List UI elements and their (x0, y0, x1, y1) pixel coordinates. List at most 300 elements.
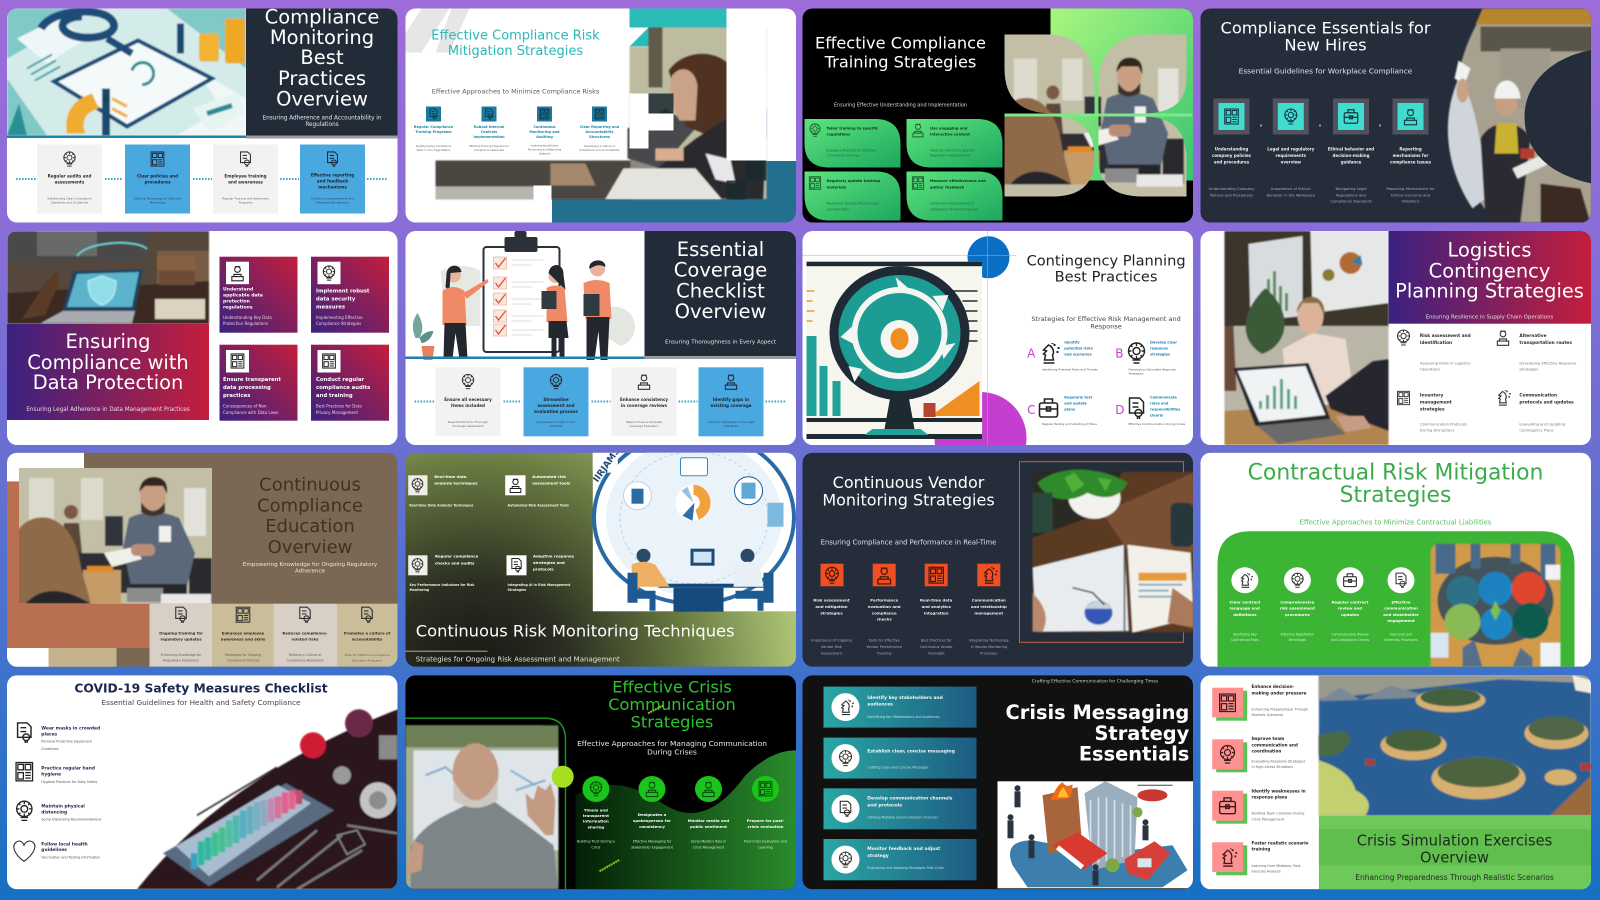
item B: B (1115, 346, 1124, 360)
card: audits and training (311, 345, 389, 421)
item: legal requirements: overview (1281, 160, 1301, 164)
card: data protection regulations: Protection Regulations (223, 321, 268, 326)
card: update materials: materials (826, 186, 847, 190)
title: Overview (276, 88, 368, 110)
subtitle: Adherence (295, 568, 326, 574)
subtitle: Empowering Knowledge for Ongoing Regulatory (243, 562, 378, 568)
item: risk assessment (1398, 330, 1471, 372)
subtitle: Essential Guidelines for Health and Safety Compliance (101, 698, 301, 707)
card: data protection regulations: protection (223, 298, 250, 304)
card: policies (125, 144, 190, 214)
item: monitor media: public sentiment (690, 824, 727, 829)
card: measure effectiveness (906, 172, 1002, 220)
top caption: Crafting Effective Communication for Challenging Times (1032, 678, 1159, 684)
item: monitoring (528, 106, 561, 156)
item: weaknesses: Identify weaknesses in (1252, 788, 1306, 793)
item: realistic scenarios (1212, 840, 1309, 875)
item: ethical behavior: Ethical behavior and (1328, 146, 1374, 152)
item: monitor media: Social Media's Role in (691, 840, 726, 844)
title: Continuous Vendor (833, 473, 985, 492)
item: masks: Guidelines (41, 747, 59, 751)
accent line (406, 651, 488, 652)
item: communication: protocols and updates (1519, 400, 1574, 406)
card: feedback: Evaluating and Adapting Strategies Post-Crisis (867, 866, 944, 870)
item: masks: places (41, 731, 57, 737)
item: masks (18, 723, 100, 751)
card: necessary items: Ensure all necessary (444, 397, 492, 402)
item: communication (1499, 390, 1574, 433)
item: weaknesses (1212, 788, 1306, 824)
item: relationship management: Integrating Technology (969, 639, 1009, 643)
item: alternative routes: Alternative (1519, 333, 1547, 339)
guide lines (802, 231, 1016, 445)
card: channels: Utilizing Multiple Communication Channels (867, 815, 938, 819)
item: hand hygiene (16, 763, 97, 784)
card: reporting: mechanisms (318, 184, 347, 190)
item: relationship management: and relationship (971, 604, 1007, 609)
card: channels: and protocols (867, 803, 902, 809)
photo: meeting with laptop and charts (1224, 231, 1388, 445)
item D: Communicate (1150, 396, 1178, 400)
title: Contractual Risk Mitigation (1248, 461, 1543, 486)
item: risk assessment: Operations (1420, 368, 1440, 372)
card: enhance consistency: in coverage reviews (621, 403, 668, 408)
card: accountability: Education Programs (352, 659, 382, 663)
card: training: and awareness (228, 180, 263, 184)
item: training programs: Risks in Your Organization (417, 148, 451, 152)
photo: island map model (1318, 675, 1592, 816)
item: local guidelines: Vaccination and Testing Information (41, 856, 100, 860)
illustration: city crisis scene (998, 781, 1194, 888)
item: reporting: Structures (589, 135, 610, 139)
title: New Hires (1284, 36, 1367, 54)
title: Crisis Simulation Exercises (1357, 833, 1552, 850)
card: channels (824, 788, 976, 829)
item: legal requirements: Legal and regulatory (1267, 146, 1315, 152)
illustration: team with clipboard (413, 231, 635, 360)
item: weaknesses: Building Team Cohesion During (1252, 811, 1304, 815)
title: Monitoring Strategies (822, 490, 995, 509)
card: data security: Implementing Effective (316, 315, 363, 320)
card: audits: Establishing Clear Compliance (48, 196, 92, 200)
item: reporting mechanisms: mechanisms for (1393, 153, 1428, 158)
item: company policies: and procedures (1214, 160, 1250, 164)
item: legal requirements: Behavior in the Workplace (1267, 193, 1316, 197)
item D: D (1115, 403, 1125, 417)
grey accent (644, 356, 796, 359)
card: ongoing training: Ongoing training for (159, 631, 203, 636)
card: ongoing training: Regulatory Adherence (163, 659, 199, 663)
item: risk assessment: identification (1420, 340, 1452, 346)
accent bar (7, 136, 246, 138)
card: ongoing training: regulatory updates (160, 637, 202, 642)
item: real-time integration (920, 564, 953, 655)
card: tailor training: Compliance Training (826, 154, 859, 158)
item: inventory (1398, 391, 1467, 433)
item: transparent sharing: Crisis (591, 846, 601, 850)
item: performance evaluation: Performance (870, 598, 899, 603)
card: data protection regulations: Understanding Key Data (223, 315, 272, 320)
item: comprehensive procedures: Comprehensive (1280, 599, 1315, 604)
item: reporting: Compliance and Accountability (579, 148, 620, 152)
title: Continuous (259, 475, 361, 496)
card: reporting: and feedback (317, 178, 348, 184)
card: streamline assessment: Streamline (543, 397, 569, 402)
item: risk assessment (811, 564, 852, 655)
card: streamline assessment: assessment and (537, 403, 575, 408)
item: stakeholder engagement: engagement (1387, 618, 1415, 623)
item: regular review: review and (1338, 606, 1362, 611)
item: adaptive strategies (506, 554, 574, 592)
card: reporting (300, 144, 365, 214)
card: transparent processing: Consequences of Non (223, 403, 267, 408)
subtitle: Ensuring Legal Adherence in Data Management Practices (26, 407, 190, 413)
item: regular review: and Compliance Checks (1331, 638, 1369, 642)
item: masks: Personal Protective Equipment (41, 740, 93, 744)
item: real-time analysis (408, 474, 478, 508)
panel: Crisis Messaging Strategy Essentials (802, 675, 1194, 889)
item: clear contract language: Identifying Key (1233, 632, 1257, 636)
decorative magenta circle (934, 392, 1026, 484)
colour blocks (7, 453, 150, 667)
item: decision-making: Enhancing Preparedness Through (1252, 707, 1308, 711)
title: Strategy (1094, 722, 1190, 745)
item: relationship management: management (974, 610, 1003, 615)
item: reporting: Accountability (585, 130, 614, 134)
card: clear messaging: Crafting Clear and Concise Messages (867, 765, 929, 769)
card: tailor training: regulations (826, 132, 851, 136)
item: internal controls: Compliance Awareness (474, 148, 505, 152)
subtitle: Effective Approaches to Minimize Contractual Liabilities (1300, 519, 1492, 527)
item: internal controls: Effective Training Programs for (469, 144, 510, 148)
title: Best Practices (1055, 269, 1158, 286)
item: monitoring: Implementing Robust (531, 144, 558, 148)
title: Essentials (1079, 743, 1189, 766)
item: relationship management (969, 564, 1009, 655)
item: reporting mechanisms: Violations (1402, 200, 1420, 204)
panel: Continuous Vendor Monitoring Strategies (802, 453, 1194, 667)
item: training programs: Training Programs (415, 130, 452, 134)
card: enhance consistency (612, 367, 676, 436)
card: awareness: Strategies for Ongoing (225, 653, 261, 657)
item: relationship management: Processes (980, 651, 998, 655)
item A: A (1027, 346, 1036, 360)
item: monitor media: Crisis Management (693, 846, 725, 850)
title: Strategies (1340, 483, 1451, 508)
card: awareness: Compliance Training (227, 659, 259, 663)
item: internal controls: Controls (481, 130, 497, 134)
item: compliance checks: Key Performance Indicators for Risk (410, 583, 475, 587)
item: company policies: Understanding Company (1209, 187, 1255, 191)
item: distancing: distancing (41, 809, 67, 815)
card: streamline assessment: Key Areas to Include in Your (537, 420, 576, 424)
subtitle: Effective Approaches to Minimize Compliance Risks (432, 88, 600, 96)
item D (1115, 396, 1186, 426)
subtitle: Ensuring Adherence and Accountability in (263, 116, 382, 122)
card: streamline assessment: Checklist (550, 424, 563, 428)
item: distancing: Social Distancing Recommendations (41, 818, 102, 822)
item B: Developing Actionable Response (1128, 368, 1176, 372)
title: Overview (675, 300, 766, 323)
card: tailor training: Engaging Methods for Effective (826, 148, 876, 152)
item: real-time integration: and analytics (922, 604, 951, 609)
item: performance evaluation: Tools for Effective (868, 639, 900, 643)
card: data protection regulations: applicable data (223, 292, 263, 298)
item: performance evaluation: Tracking (876, 651, 891, 655)
card: measure effectiveness: gather feedback (930, 186, 965, 190)
item: regular review: Comprehensive Review (1331, 632, 1369, 636)
item: decision-making: Realistic Scenarios (1252, 713, 1283, 717)
item: stakeholder engagement: Indemnity Provisions (1384, 638, 1418, 642)
item: regular review: updates (1341, 612, 1360, 617)
item C: Regular Testing and Updating of Plans (1042, 422, 1097, 426)
card: identify gaps: existing coverage (710, 403, 752, 408)
divider cross (1004, 114, 1192, 116)
card: audits and training: compliance audits (316, 385, 370, 391)
item: communication: Evaluating Response Strategies (1252, 759, 1305, 763)
card: data security: data security (316, 297, 356, 303)
photo: team around strategy table (1430, 544, 1560, 667)
item: training programs: Identifying Key Compliance (416, 144, 452, 148)
dark checker (648, 94, 766, 200)
card: accountability: accountability (352, 637, 383, 642)
card: feedback: Monitor feedback and adjust (867, 846, 941, 852)
item: post-crisis evaluation: Learning (758, 846, 773, 850)
card: reduces risks: Reduces compliance- (282, 631, 328, 636)
title: Training Strategies (824, 52, 976, 72)
card: training: Programs (239, 200, 253, 204)
title: Communication (608, 695, 736, 714)
card: feedback (824, 839, 976, 880)
item: regular review (1331, 567, 1369, 642)
subtitle: Effective Approaches for Managing Communication (577, 739, 767, 748)
item: performance evaluation: checks (877, 617, 892, 622)
item: hand hygiene: Hygiene Practices for Daily Safety (41, 780, 97, 784)
title: Checklist (676, 279, 765, 302)
card: channels: Develop communication channels (867, 796, 953, 802)
subtitle: Ensuring Effective Understanding and Implementation (834, 102, 967, 108)
item: risk assessment: Assessment (821, 651, 843, 655)
item: reporting mechanisms (1386, 98, 1435, 204)
illustration: target monitor (806, 262, 982, 439)
card: reporting: Continuous Improvement and (311, 196, 354, 200)
item B: Strategies (1128, 371, 1144, 375)
card: feedback: strategy (867, 853, 889, 859)
item: compliance checks: Regular compliance (435, 554, 479, 559)
card: policies: Clear policies and (137, 174, 178, 178)
item: regular review: Regular contract (1332, 599, 1369, 604)
item: local guidelines: guidelines (41, 847, 67, 853)
item: decision-making (1212, 684, 1308, 721)
card: identify gaps (698, 367, 764, 436)
item: risk assessment: strategies (820, 610, 843, 615)
item: communication: Evaluating and Updating (1519, 422, 1565, 426)
grey accent (246, 136, 398, 138)
item: clear contract language: Clear contract (1229, 599, 1261, 604)
item A: and scenarios (1064, 353, 1092, 357)
item: company policies: Understanding (1215, 146, 1248, 152)
item B: response (1150, 347, 1169, 351)
title: COVID-19 Safety Measures Checklist (74, 682, 328, 696)
item: comprehensive procedures: Techniques (1288, 638, 1307, 642)
item: performance evaluation (866, 564, 902, 655)
item: automated tools: Automated risk (532, 474, 566, 479)
item: stakeholder engagement (1383, 567, 1419, 642)
item: reporting: Developing a Culture of (584, 144, 615, 148)
card: engaging content (906, 119, 1002, 168)
card: policies: Utilizing Technology for Effective (134, 196, 181, 200)
card: audits: assessments (55, 180, 85, 184)
title: Strategies (631, 712, 713, 731)
card: audits and training: Privacy Management (316, 410, 359, 415)
card: training: Employee training (224, 174, 267, 178)
card: awareness (212, 604, 274, 667)
item: risk assessment: Vendor Risk (821, 645, 843, 649)
item: comprehensive procedures: risk assessment (1280, 606, 1315, 611)
item: realistic scenarios: Foster realistic scenario (1252, 840, 1309, 845)
card: awareness: awareness and skills (221, 637, 266, 642)
item: monitor media: Monitor media and (688, 818, 729, 823)
title: Best (300, 46, 344, 69)
panel: Logistics Contingency Planning Strategies (1200, 231, 1592, 445)
item: internal controls: Robust Internal (474, 125, 504, 129)
item: clear contract language: language and (1230, 606, 1260, 611)
item: transparent sharing: Timely and (584, 807, 608, 812)
card: data security: Compliance Strategies (316, 321, 361, 326)
photo: laptop with shield and law books (7, 231, 209, 324)
card: audits and training: Best Practices for Data (316, 403, 362, 408)
panel: COVID-19 Safety Measures Checklist (7, 675, 398, 889)
card: transparent processing: Ensure transparent (223, 377, 281, 383)
card: audits and training: and training (316, 393, 353, 399)
card: ongoing training: Enhancing Knowledge for (161, 653, 202, 657)
item: alternative routes: Developing Effective Response (1519, 361, 1577, 365)
item: ethical behavior: Compliance Standards (1330, 200, 1372, 204)
item B: Develop clear (1150, 341, 1177, 345)
item: adaptive strategies: Adaptive response (533, 554, 574, 559)
card: streamline assessment: evaluation process (534, 409, 578, 414)
item: inventory: Inventory (1420, 393, 1443, 399)
card: stakeholders: audiences (867, 702, 893, 708)
item: hand hygiene: Practice regular hand (41, 766, 95, 772)
card: audits: Regular audits and (48, 174, 91, 178)
item: decision-making: making under pressure (1252, 691, 1307, 696)
card: training: Regular Training and Awareness (222, 196, 269, 200)
dark teal corner block (552, 161, 796, 222)
subtitle: During Crises (647, 747, 697, 756)
white photo notches (534, 8, 796, 200)
panel: Contingency Planning Best Practices (802, 231, 1193, 484)
item: reporting mechanisms: Reporting Mechanisms for (1386, 187, 1435, 191)
item: monitoring: Monitoring and Reporting (528, 148, 561, 152)
item: monitoring: Systems (539, 152, 551, 156)
title: Compliance (265, 6, 379, 28)
item: communication: communication and (1252, 742, 1298, 747)
item: spokesperson: Effective Messaging for (633, 840, 672, 844)
item: communication: Contingency Plans (1519, 429, 1554, 433)
photo frame (406, 718, 566, 889)
item: monitoring: Auditing (536, 135, 553, 139)
item: ethical behavior: Navigating Legal (1335, 187, 1367, 191)
card: enhance consistency: Enhance consistency (620, 397, 668, 402)
teal block (630, 8, 727, 46)
item: real-time integration: integration (924, 610, 949, 615)
item: transparent sharing: information (583, 819, 609, 824)
panel: Continuous Compliance Education Overview (0, 408, 398, 698)
item: alternative routes: Strategies (1519, 368, 1538, 372)
item: spokesperson (631, 776, 674, 850)
item D: roles and (1150, 402, 1169, 406)
item: clear contract language (1229, 567, 1261, 642)
title: Continuous Risk Monitoring Techniques (416, 621, 735, 640)
item: legal requirements: requirements (1276, 153, 1307, 158)
item: real-time analysis: Real-time Data Analysis Techniques (409, 504, 473, 508)
item: decision-making: Enhance decision- (1252, 684, 1294, 689)
card: training (213, 144, 278, 214)
header block (1388, 231, 1592, 324)
panel: Effective Compliance Training Strategies (802, 8, 1193, 222)
item C (1027, 396, 1097, 426)
item: compliance checks (408, 554, 479, 592)
card: reduces risks: Compliance Awareness (287, 659, 324, 663)
item: risk assessment: and mitigation (815, 604, 848, 609)
item: inventory: During Disruptions (1420, 429, 1455, 433)
card: policies: Monitoring (150, 200, 165, 204)
item: transparent sharing: Building Trust During a (577, 840, 615, 844)
item: training programs (414, 106, 454, 152)
item: stakeholder engagement: Insurance and (1390, 632, 1412, 636)
card: engaging content: Use engaging and (930, 126, 968, 130)
title: Contingency Planning (1027, 253, 1186, 270)
item: reporting mechanisms: compliance issues (1390, 160, 1432, 164)
item: post-crisis evaluation: Post-Crisis Evaluation and (744, 840, 787, 844)
panel: Compliance Essentials for New Hires (1200, 8, 1592, 222)
item: real-time integration: Continuous Vendor (920, 645, 953, 649)
item: alternative routes: transportation routes (1519, 340, 1572, 346)
item: internal controls (469, 106, 510, 152)
item: risk assessment: Risk assessment and (1420, 333, 1471, 339)
item: training programs: Regular Compliance (414, 125, 454, 129)
card: policies: procedures (144, 180, 171, 184)
title: Practices (278, 67, 366, 90)
item: company policies: Policies and Procedures (1210, 193, 1253, 197)
item: performance evaluation: Vendor Performance (866, 645, 902, 649)
subtitle: Ensuring Resilience in Supply Chain Operations (1426, 314, 1553, 320)
title: Contingency (1429, 259, 1550, 282)
connectors (414, 400, 786, 402)
item: clear contract language: definitions (1233, 612, 1257, 617)
card: ongoing training (150, 604, 212, 667)
item: monitor media (688, 776, 729, 850)
item A: Identifying Potential Risks and Threats (1042, 368, 1098, 372)
subtitle: Ensuring Thoroughness in Every Aspect (665, 339, 777, 345)
item: monitoring: Continuous (533, 125, 556, 129)
item: weaknesses: Crisis Management (1252, 817, 1285, 821)
item: alternative routes (1497, 331, 1577, 372)
item: real-time analysis: Real-time data (434, 474, 467, 479)
panel: Effective Compliance Risk Mitigation Strategies (406, 8, 796, 222)
panel: Contractual Risk Mitigation Strategies (1200, 453, 1591, 667)
connectors (16, 178, 387, 180)
card: accountability: Promotes a culture of (344, 631, 391, 636)
item: automated tools: assessment tools (532, 481, 571, 486)
item: realistic scenarios: Learning from Mistakes: Post- (1252, 864, 1302, 868)
card: clear messaging (824, 738, 976, 779)
item: relationship management: Communication (972, 598, 1006, 603)
title: Ensuring (66, 330, 150, 353)
item: communication: coordination (1252, 749, 1281, 754)
title: Compliance (257, 495, 363, 516)
